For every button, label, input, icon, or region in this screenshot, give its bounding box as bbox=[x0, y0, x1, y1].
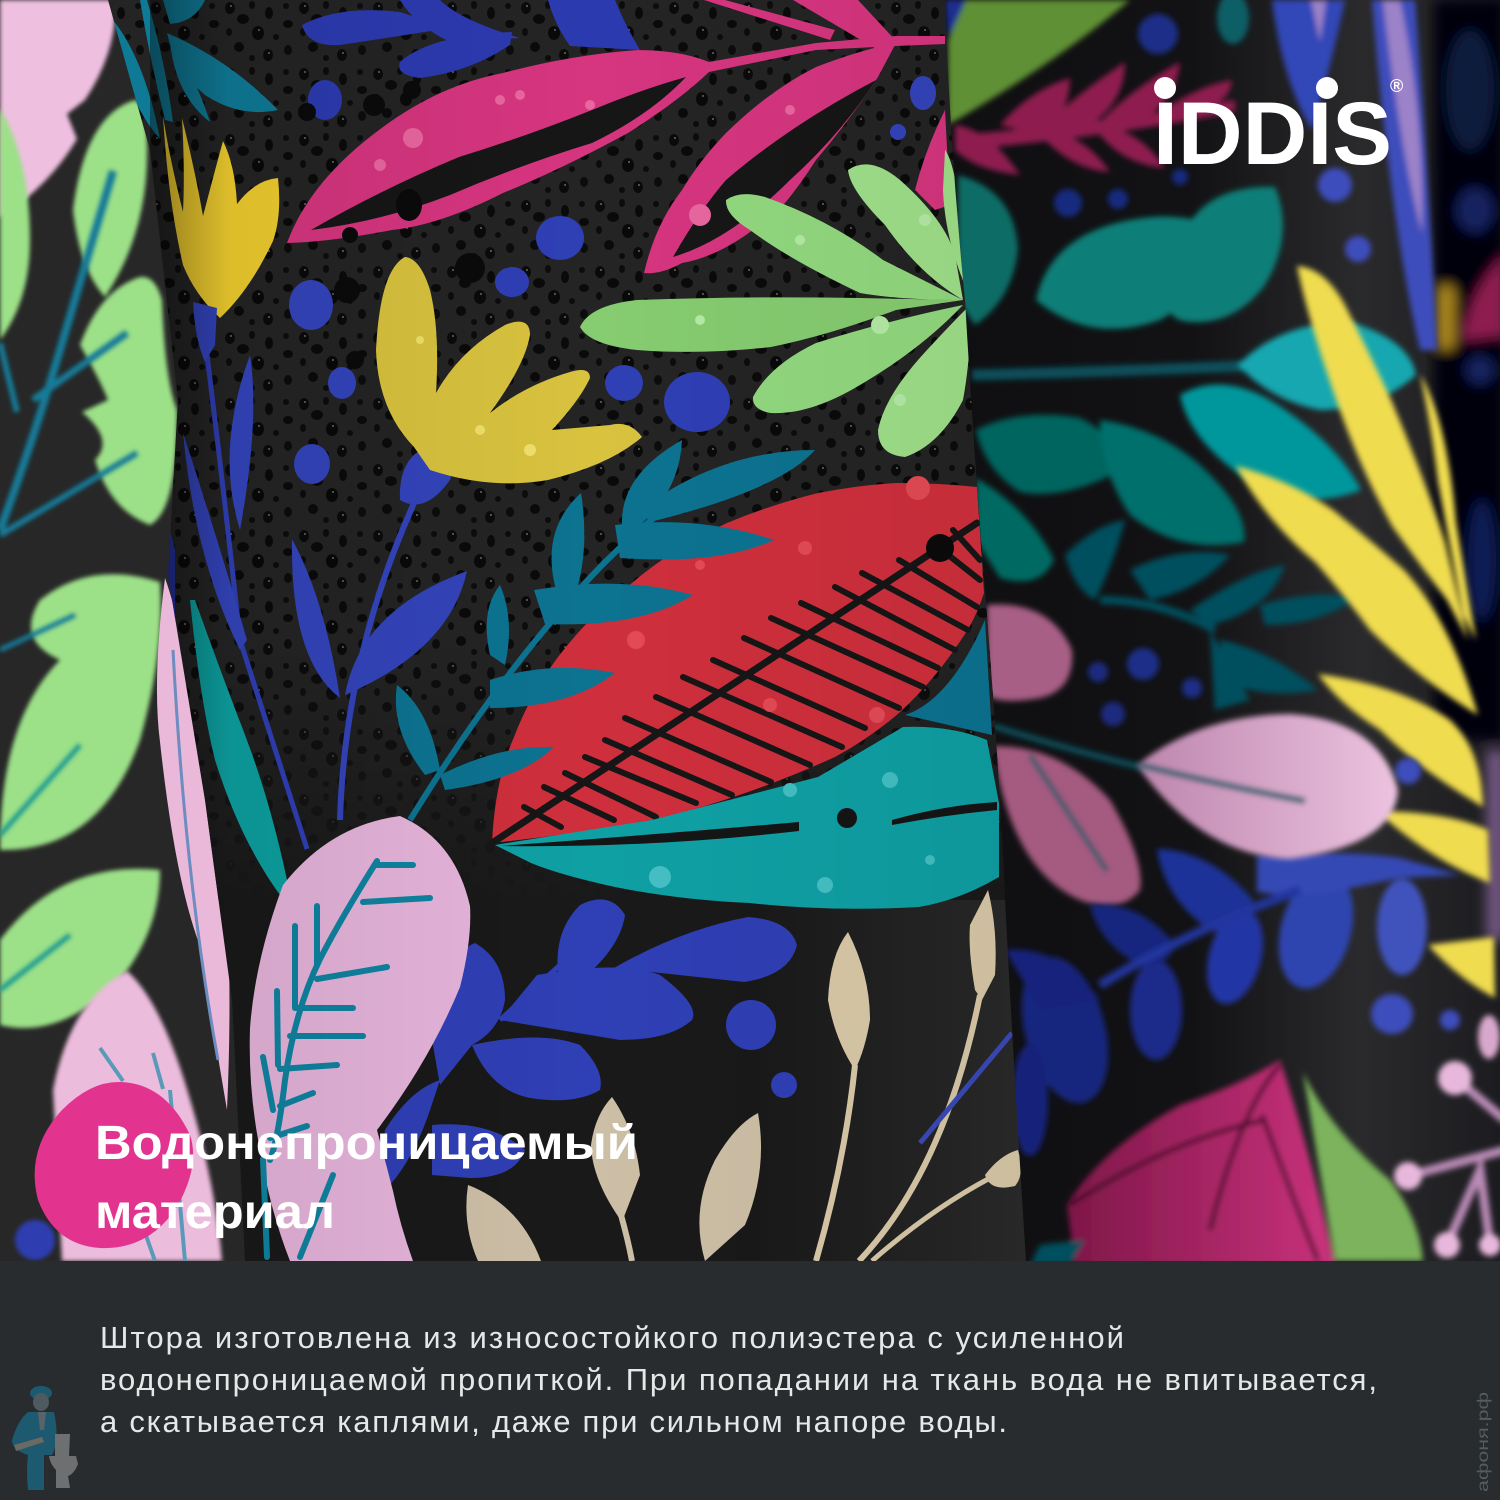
icon: plumber with toilet bbox=[12, 1386, 78, 1490]
green leaf and blue corner, top bbox=[945, 0, 1130, 125]
teal top-left leaves bbox=[113, 0, 278, 139]
panel: front curtain bbox=[100, 0, 1040, 1261]
panel: blurred background curtain bbox=[940, 0, 1500, 1265]
logo: IDDIS: ® bbox=[1390, 76, 1403, 96]
magenta leaves bbox=[287, 0, 950, 273]
blue stems and leaves bbox=[165, 76, 936, 895]
fern on pink leaf bbox=[263, 861, 430, 1257]
logo: IDDIS: IDDIS bbox=[1153, 83, 1392, 183]
blue branch bbox=[1005, 849, 1460, 1156]
body text: водонепроницаемой пропиткой. При попадании на ткань вода не впитывается, bbox=[100, 1362, 1377, 1397]
bottom band bbox=[0, 1261, 1500, 1500]
yellow flower bbox=[376, 257, 642, 483]
magenta fern bbox=[955, 62, 1235, 175]
yellow leaves bbox=[1236, 266, 1495, 998]
pink tulip bbox=[1137, 714, 1398, 859]
magenta leaf slits bbox=[311, 77, 876, 257]
green leaves bbox=[0, 100, 177, 1028]
mauve petals bbox=[987, 605, 1202, 906]
heading: материал bbox=[95, 1186, 335, 1239]
droplets bbox=[298, 81, 954, 562]
heading bbox=[95, 1117, 638, 1239]
teal leaf bbox=[495, 727, 999, 909]
green palm leaf bbox=[580, 150, 970, 457]
panel: left curtain bbox=[0, 0, 260, 1261]
pink blob bbox=[35, 1082, 193, 1248]
teal stem bbox=[995, 721, 1144, 773]
pink sprig bbox=[1394, 1015, 1500, 1258]
red leaf bbox=[492, 483, 984, 843]
watermark: афоня.рф bbox=[1475, 1392, 1492, 1492]
yellow tulip bbox=[163, 116, 279, 318]
blue dots bbox=[1371, 758, 1460, 1034]
red leaf stripes bbox=[492, 523, 980, 843]
magenta and green leaf bbox=[1030, 1060, 1423, 1265]
blue top branch bbox=[302, 0, 640, 120]
teal leaf slits bbox=[500, 802, 997, 846]
blue bottom flower bbox=[375, 899, 797, 1200]
teal leaves bbox=[958, 175, 1416, 581]
beige stalks bbox=[466, 890, 1021, 1261]
pink leaf bbox=[250, 816, 470, 1261]
pink blob bbox=[0, 0, 115, 218]
blue and violet streaks bbox=[1054, 0, 1437, 350]
pink leaves bbox=[53, 971, 222, 1261]
body text: а скатывается каплями, даже при сильном напоре воды. bbox=[100, 1404, 1007, 1439]
droplets on colour bbox=[374, 90, 935, 893]
heading: Водонепроницаемый bbox=[95, 1117, 638, 1170]
far right dark fold with spots bbox=[1434, 0, 1500, 940]
teal back fern bbox=[1065, 520, 1358, 710]
teal veins bbox=[0, 171, 137, 990]
fold shading bbox=[150, 0, 1030, 1261]
body text: Штора изготовлена из износостойкого полиэстера с усиленной bbox=[100, 1320, 1124, 1355]
body text bbox=[100, 1320, 1377, 1439]
blue-teal branches bbox=[396, 440, 992, 820]
